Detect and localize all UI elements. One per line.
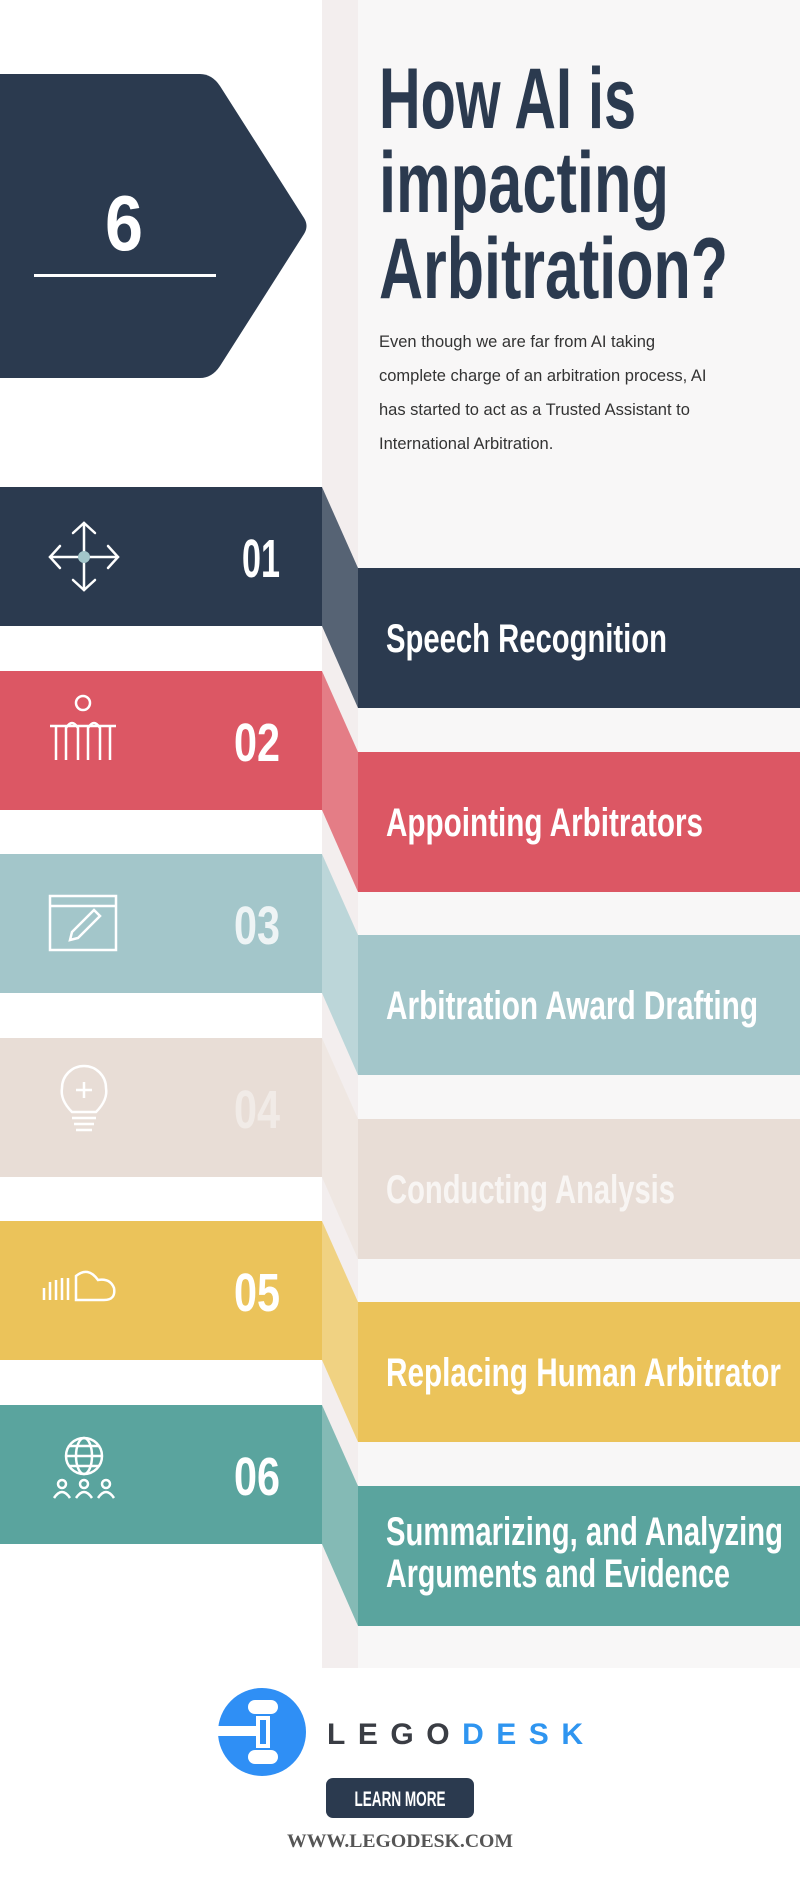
badge: 6 <box>0 74 306 378</box>
badge: 6: 6 <box>105 179 143 267</box>
step 01 <box>0 487 800 708</box>
icon: people at table <box>50 696 116 760</box>
step 01: 01 <box>242 529 280 589</box>
intro paragraph: complete charge of an arbitration process, AI <box>379 367 706 385</box>
step 02 <box>0 671 800 892</box>
step 04 <box>0 1038 800 1259</box>
right background panel <box>322 0 800 1668</box>
step 03: 03 <box>234 896 280 956</box>
step 05 <box>0 1221 800 1442</box>
step 05: 05 <box>234 1263 280 1323</box>
title: impacting <box>379 135 669 231</box>
step 04: 04 <box>234 1080 280 1140</box>
logo: LEGO DESK <box>327 1718 583 1751</box>
logo <box>218 1688 583 1776</box>
icon: light bulb <box>62 1066 106 1130</box>
icon: globe with people <box>54 1438 114 1498</box>
step 04: Conducting Analysis <box>386 1168 675 1212</box>
step 06 <box>0 1405 800 1626</box>
step 06: 06 <box>234 1447 280 1507</box>
intro paragraph: has started to act as a Trusted Assistant to <box>379 401 690 419</box>
intro paragraph <box>379 333 706 453</box>
icon: soundcloud <box>44 1272 114 1300</box>
icon: move arrows <box>50 523 118 590</box>
icon: window with pencil <box>50 896 116 950</box>
step 01: Speech Recognition <box>386 617 667 661</box>
website url: WWW.LEGODESK.COM <box>287 1831 513 1852</box>
title: How AI is <box>379 51 636 147</box>
title <box>379 51 728 317</box>
button: learn more: LEARN MORE <box>354 1788 446 1811</box>
step 03 <box>0 854 800 1075</box>
step 02: 02 <box>234 713 280 773</box>
intro paragraph: International Arbitration. <box>379 435 553 453</box>
icon: gavel circle <box>218 1688 306 1776</box>
button: learn more <box>326 1778 474 1818</box>
intro paragraph: Even though we are far from AI taking <box>379 333 655 351</box>
